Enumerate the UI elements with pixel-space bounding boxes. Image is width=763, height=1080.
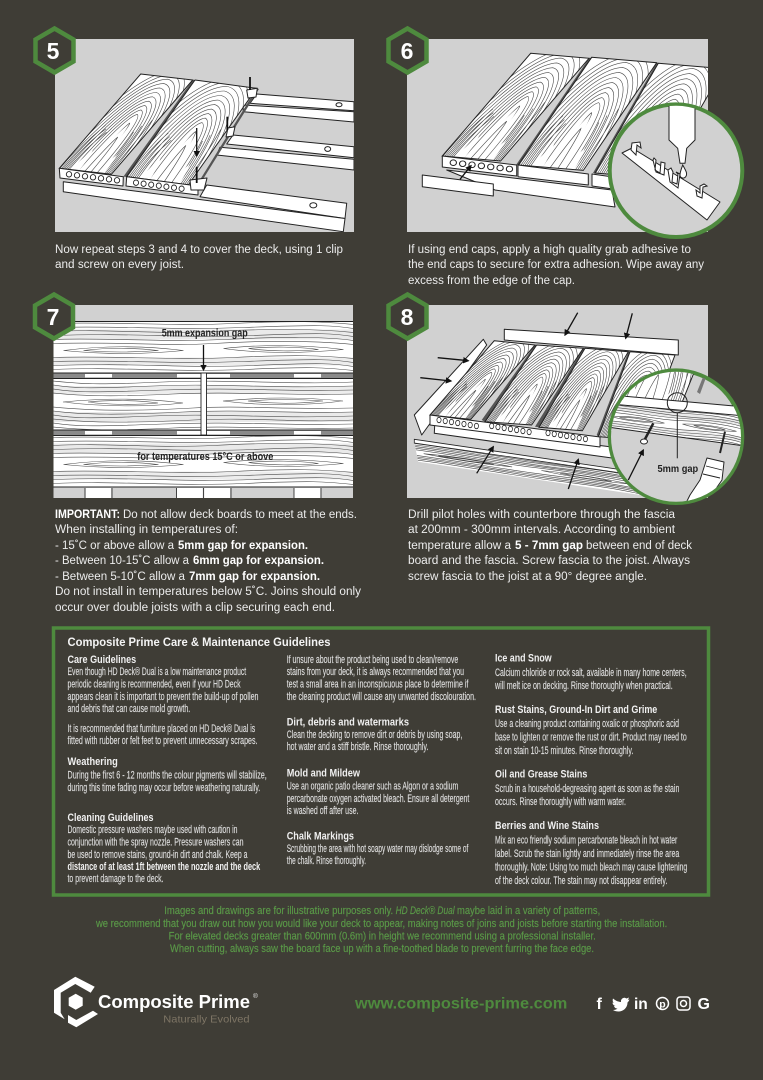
text: step 7 caption: - Between 10-15˚C allow a (55, 555, 190, 567)
badge: step 7 (35, 294, 73, 338)
column 2: the chalk. Rinse thoroughly. (287, 855, 366, 867)
text: step 7 caption: Do not allow deck boards to meet at the ends. (123, 509, 357, 521)
column 1: distance of at least 1ft between the nozzle and the deck (68, 861, 260, 873)
column 2: test a small area in an inconspicuous place to determine if (287, 678, 468, 690)
column 2: Use an organic patio cleaner such as Algon or a sodium (287, 780, 458, 792)
column 1: fitted with rubber or felt feet to prevent unnecessary scrapes. (68, 735, 258, 747)
text: step 7 caption: - Between 5-10˚C allow a (55, 571, 186, 583)
column 2: Chalk Markings (287, 830, 354, 842)
panel: step 6 illustration (407, 39, 749, 237)
text: step 7 caption: Do not install in temperatures below 5˚C. Joins should only (55, 586, 361, 598)
badge: step 6: 6 (401, 38, 413, 64)
badge: step 6 (388, 28, 426, 72)
text: step 8 caption: temperature allow a (408, 540, 512, 552)
callout: fascia gap detail (608, 368, 744, 505)
icon: facebook: f (596, 996, 602, 1013)
icon: end cap strip (622, 148, 720, 220)
label: temperature note: for temperatures 15°C or above (137, 451, 273, 463)
text: step 6 caption: If using end caps, apply a high quality grab adhesive to (408, 244, 691, 256)
text: step 5 caption (55, 244, 343, 271)
badge: step 5 (36, 28, 74, 72)
text: step 7 caption: When installing in temperatures of: (55, 524, 238, 536)
column 1: Even though HD Deck® Dual is a low maintenance product (68, 666, 246, 678)
icon: instagram (677, 997, 690, 1010)
text: step 5 caption: Now repeat steps 3 and 4 to cover the deck, using 1 clip (55, 244, 343, 256)
text: step 6 caption (408, 244, 704, 287)
text: green disclaimer notes: we recommend that you draw out how you would like your deck to appear, making notes of joins and joists before starting the installation. (95, 918, 667, 930)
column 3: Oil and Grease Stains (495, 768, 587, 780)
arrow: end cap direction (460, 166, 471, 179)
column 3: sit on stain 10-15 minutes. Rinse thoroughly. (495, 745, 633, 757)
callout: adhesive detail (610, 100, 742, 237)
badge: step 7: 7 (47, 304, 59, 330)
icons: social media (596, 996, 710, 1013)
icon: adhesive tube (669, 100, 695, 163)
text: step 7 caption (55, 509, 361, 614)
fascia board (414, 439, 639, 495)
panel: step 5 illustration (47, 39, 354, 232)
text: green disclaimer notes: HD Deck® Dual (396, 905, 455, 917)
arrow: expansion gap (202, 345, 204, 370)
icon: linkedin: in (634, 996, 648, 1013)
text: step 7 caption: 5mm gap for expansion. (178, 540, 308, 552)
column 2: Scrubbing the area with hot soapy water may dislodge some of (287, 843, 468, 855)
text: step 7 caption: - 15˚C or above allow a (55, 540, 175, 552)
column 1: be used to remove stains, ground-in dirt and chalk. Keep a (68, 849, 248, 861)
heading: guidelines title: Composite Prime Care & Maintenance Guidelines (68, 635, 331, 649)
column 3: will melt ice on decking. Rinse thoroughly when practical. (494, 680, 673, 692)
text: step 8 caption: board and the fascia. Screw fascia to the joist. Always (408, 555, 690, 567)
column 2: Clean the decking to remove dirt or debris by using soap, (287, 729, 462, 741)
icon: screw (640, 423, 653, 444)
text: step 8 caption: 5 - 7mm gap (515, 540, 583, 552)
label: 5mm gap: 5mm gap (658, 463, 698, 475)
column 1: appears clean it is important to prevent the build-up of pollen (68, 691, 259, 703)
label: expansion gap: 5mm expansion gap (162, 328, 248, 340)
column 3: Ice and Snow (495, 652, 552, 664)
column 3: occurs. Rinse thoroughly with warm water. (495, 796, 626, 808)
text: step 6 caption: the end caps to secure for extra adhesion. Wipe away any (408, 259, 704, 271)
text: step 6 caption: excess from the edge of the cap. (408, 275, 575, 287)
icon: google: G (698, 996, 710, 1013)
badge: step 8 (388, 294, 426, 338)
column 1: Weathering (68, 756, 118, 768)
column 2: stains from your deck, it is always recommended that you (287, 666, 464, 678)
panel: step 8 illustration (407, 305, 745, 510)
text: green disclaimer notes: maybe laid in a variety of patterns, (457, 905, 600, 917)
text: step 8 caption: Drill pilot holes with counterbore through the fascia (408, 509, 676, 521)
column 3: of the deck colour. The stain may not disappear entirely. (495, 875, 667, 887)
icon: clip screws (197, 77, 250, 183)
column 1: During the first 6 - 12 months the colour pigments will stabilize, (68, 770, 267, 782)
column 3 (494, 652, 687, 887)
text: green disclaimer notes (95, 905, 667, 955)
column 2: is washed off after use. (287, 805, 358, 817)
panel: care and maintenance guidelines (54, 628, 708, 895)
logo: Composite Prime (54, 977, 258, 1027)
panel: step 7 illustration (53, 305, 354, 498)
icon: twitter (612, 998, 630, 1012)
column 1: Care Guidelines (68, 654, 136, 666)
text: step 8 caption: screw fascia to the joist at a 90° degree angle. (408, 571, 647, 583)
text: step 8 caption: at 200mm - 300mm intervals. According to ambient (408, 524, 676, 536)
column 2 (287, 654, 476, 867)
badge: step 8: 8 (401, 304, 414, 330)
column 1: during this time fading may occur before weathering naturally. (68, 782, 260, 794)
column 2: percarbonate oxygen activated bleach. Ensure all detergent (287, 793, 469, 805)
column 2: Dirt, debris and watermarks (287, 716, 409, 728)
logo: Composite Prime: ® (253, 992, 258, 1000)
column 2: Mold and Mildew (287, 768, 361, 780)
logo: Composite Prime: Naturally Evolved (163, 1014, 250, 1026)
arrow: screw direction (196, 128, 198, 156)
text: step 7 caption: 7mm gap for expansion. (189, 571, 320, 583)
badge: step 5: 5 (47, 38, 60, 64)
arrows: fascia directions (420, 313, 632, 489)
icon: pinterest: p (659, 998, 666, 1010)
column 2: hot water and a stiff bristle. Rinse thoroughly. (287, 741, 428, 753)
text: step 7 caption: occur over double joists with a clip securing each end. (55, 602, 335, 614)
column 1: It is recommended that furniture placed on HD Deck® Dual is (68, 723, 255, 735)
logo: Composite Prime: Composite Prime (98, 991, 250, 1012)
text: green disclaimer notes: For elevated decks greater than 600mm (0.6m) in height we recommend using a professional installer. (169, 930, 596, 942)
text: step 8 caption (408, 509, 692, 583)
column 3: Rust Stains, Ground-In Dirt and Grime (495, 704, 657, 716)
text: green disclaimer notes: When cutting, always saw the board face up with a fine-toothed blade to prevent furring the face edge. (170, 943, 594, 955)
column 1: conjunction with the spray nozzle. Pressure washers can (68, 836, 244, 848)
icon: drill (685, 432, 725, 505)
column 3: Berries and Wine Stains (495, 820, 599, 832)
column 2: the cleaning product will cause any unwanted discolouration. (287, 691, 476, 703)
website url: www.composite-prime.com (354, 996, 567, 1012)
text: green disclaimer notes: Images and drawings are for illustrative purposes only. (164, 905, 393, 917)
column 1: and debris that can cause mold growth. (68, 703, 190, 715)
column 1: Domestic pressure washers maybe used with caution in (68, 824, 238, 836)
column 1 (68, 654, 267, 885)
column 1: Cleaning Guidelines (68, 812, 154, 824)
column 2: If unsure about the product being used to clean/remove (287, 654, 458, 666)
column 1: to prevent damage to the deck. (68, 873, 164, 885)
arrow: screw direction (628, 450, 643, 480)
text: step 8 caption: between end of deck (586, 540, 692, 552)
text: step 7 caption: IMPORTANT: (55, 509, 120, 521)
column 1: periodic cleaning is recommended, even if your HD Deck (68, 678, 241, 690)
text: step 7 caption: 6mm gap for expansion. (193, 555, 324, 567)
text: step 5 caption: and screw on every joist. (55, 259, 184, 271)
gap indicator (667, 393, 687, 458)
